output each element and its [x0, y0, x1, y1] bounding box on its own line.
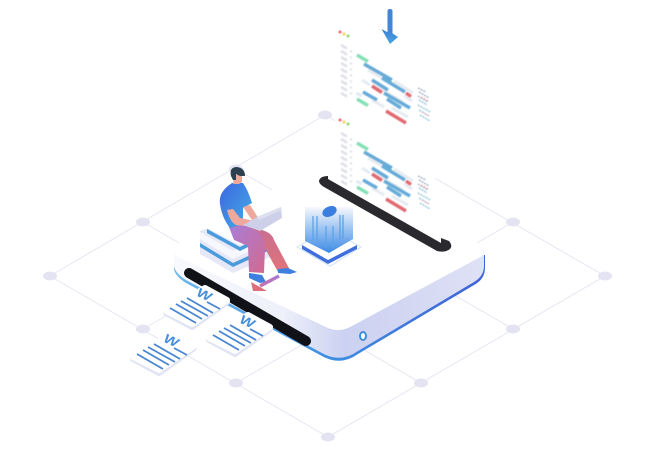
- card: word document 2: W: [236, 313, 258, 331]
- torso: [220, 183, 252, 228]
- figure: person with laptop: [220, 167, 297, 283]
- lower code view: [338, 118, 430, 211]
- card: word document 1: W: [193, 286, 215, 304]
- code screen slot: [319, 176, 451, 252]
- cube bars: [313, 215, 343, 248]
- card: word document 3: W: [160, 332, 182, 350]
- document sheets: [335, 24, 435, 224]
- platform: [174, 160, 485, 361]
- front leg: [227, 222, 265, 273]
- pink arrow: [251, 276, 279, 291]
- arms: [227, 205, 259, 227]
- head: [233, 174, 242, 184]
- shoes: [249, 273, 266, 283]
- network grid background: [43, 110, 612, 442]
- cube gem: [321, 204, 338, 219]
- platform blue rim: [174, 255, 485, 361]
- upper code view: [338, 30, 430, 123]
- code document panels: [335, 24, 435, 224]
- seat stack: [200, 203, 270, 273]
- Word document cards: [133, 286, 270, 373]
- document slot: [189, 273, 306, 341]
- port: [360, 332, 366, 340]
- laptop: [243, 207, 282, 231]
- glass processor cube: [297, 204, 361, 266]
- hair: [231, 167, 245, 180]
- back leg: [248, 226, 290, 272]
- platform side: [174, 250, 484, 358]
- icon: blue down arrow: [382, 9, 398, 44]
- platform top surface: [174, 160, 484, 330]
